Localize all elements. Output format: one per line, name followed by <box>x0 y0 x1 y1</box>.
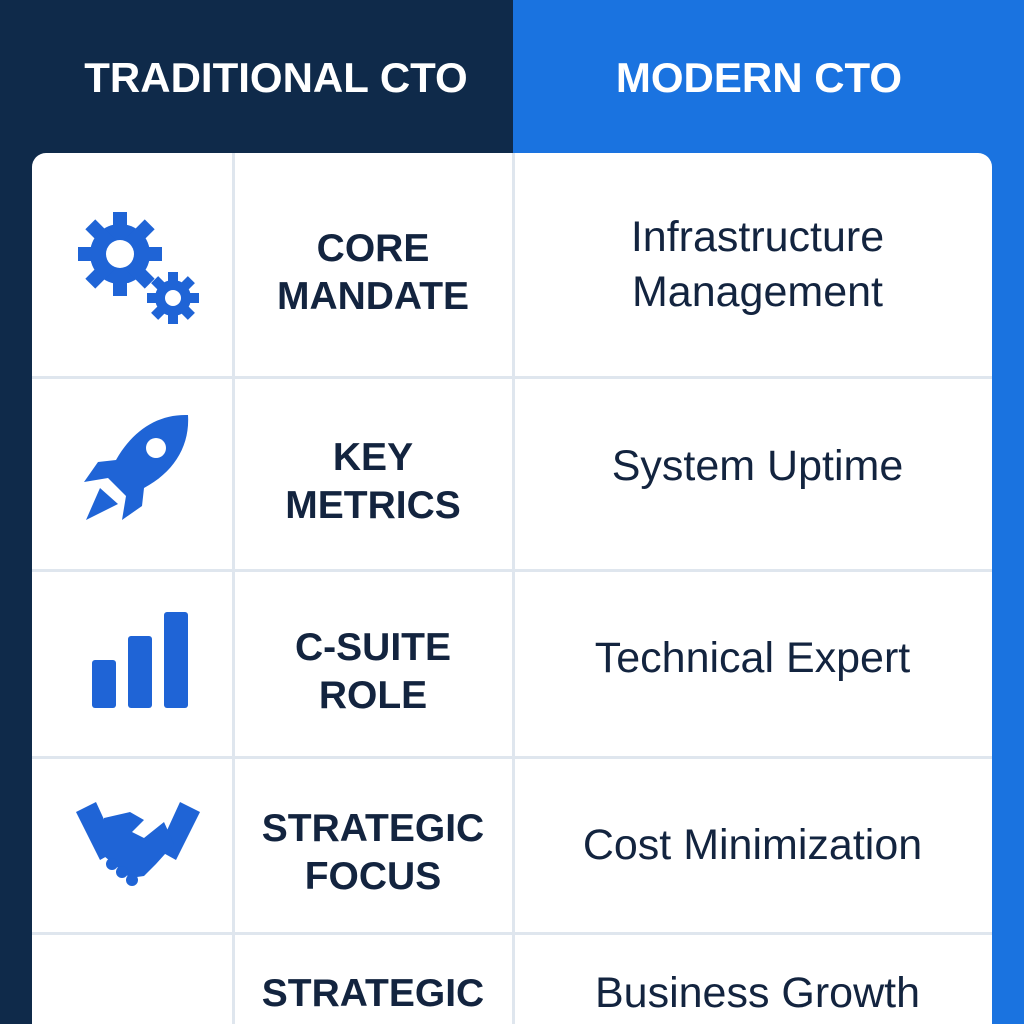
label: key metrics: METRICS <box>285 484 461 526</box>
value: infrastructure management: Management <box>632 268 883 316</box>
panel: modern background <box>513 0 1024 1024</box>
label: strategic focus: FOCUS <box>305 855 441 898</box>
label: strategic focus repeated: STRATEGIC <box>262 972 484 1015</box>
value: business growth: Business Growth <box>595 968 920 1016</box>
value: infrastructure management: Infrastructure <box>631 213 884 261</box>
value: cost minimization: Cost Minimization <box>583 820 922 868</box>
label: core mandate <box>277 227 469 318</box>
value: system uptime: System Uptime <box>612 442 903 490</box>
label: c-suite role <box>295 626 451 716</box>
label: key metrics <box>285 436 461 526</box>
label: core mandate: CORE <box>317 227 429 270</box>
icon: bar chart <box>92 612 188 708</box>
value: technical expert: Technical Expert <box>595 634 910 682</box>
label: c-suite role: ROLE <box>319 674 427 716</box>
label: strategic focus <box>262 807 484 898</box>
label: c-suite role: C-SUITE <box>295 626 451 668</box>
icon: handshake <box>76 802 200 886</box>
heading: traditional cto: TRADITIONAL CTO <box>84 54 468 101</box>
heading: modern cto: MODERN CTO <box>616 54 902 101</box>
label: key metrics: KEY <box>333 436 413 478</box>
icon: rocket <box>84 415 188 520</box>
label: strategic focus: STRATEGIC <box>262 807 484 850</box>
value: infrastructure management <box>631 213 884 316</box>
panel: comparison table <box>32 153 992 1024</box>
label: core mandate: MANDATE <box>277 275 469 318</box>
icon: gears <box>78 212 199 324</box>
